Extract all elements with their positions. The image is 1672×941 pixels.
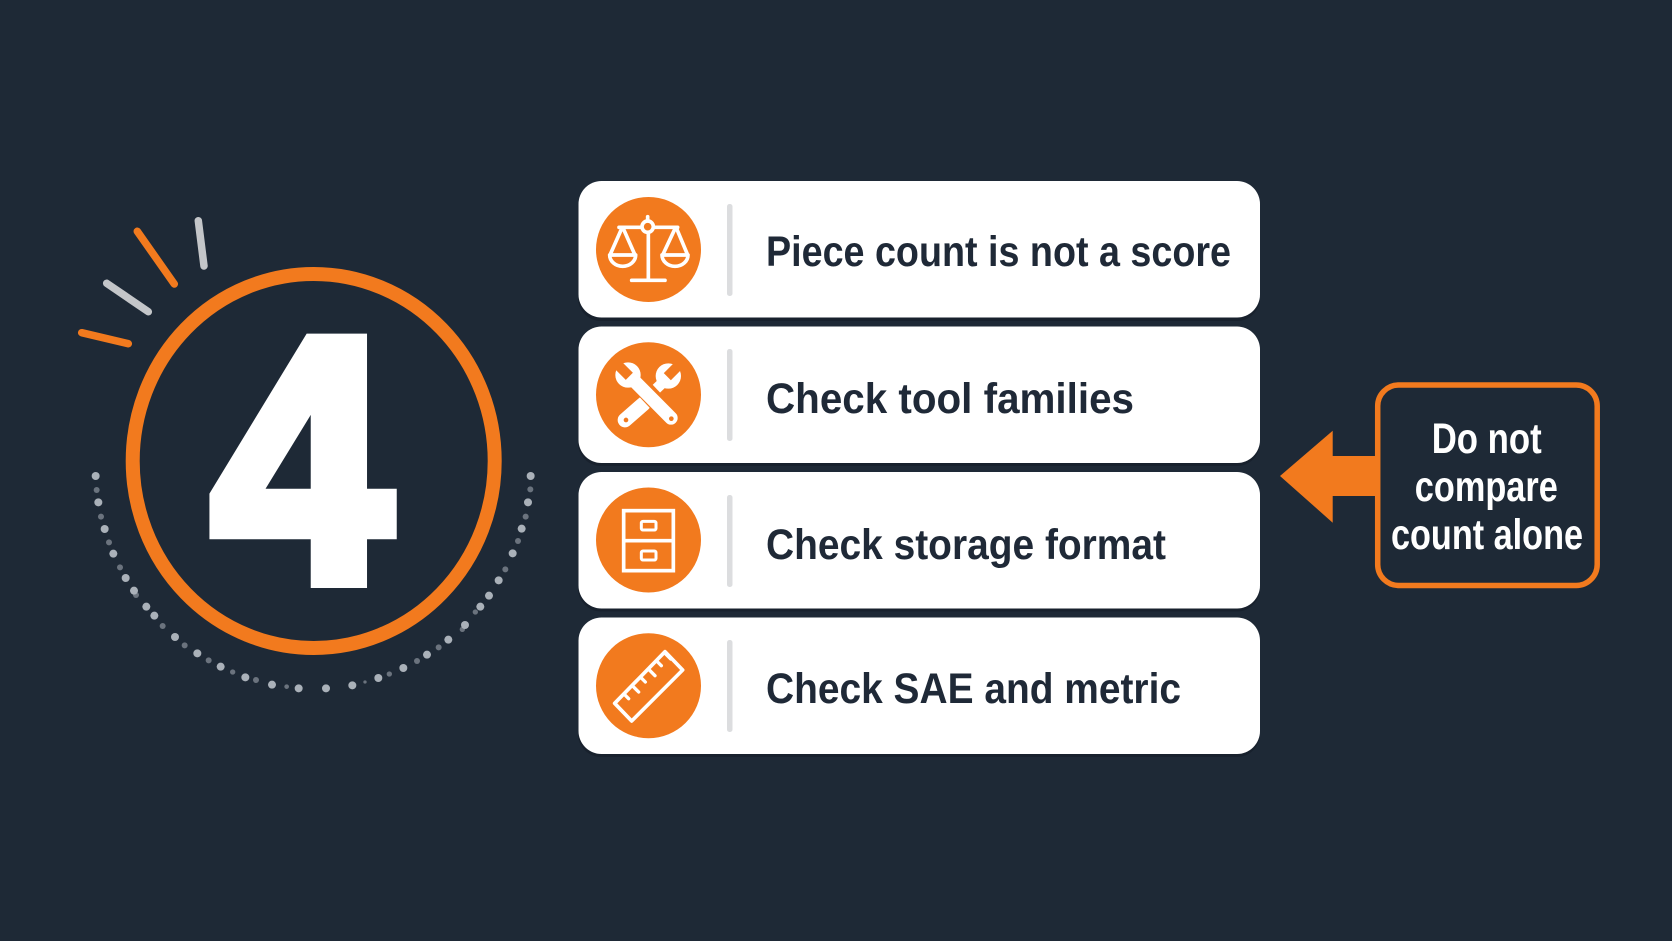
divider (727, 640, 732, 732)
callout: do not compare count alone: Do not (1432, 415, 1542, 463)
divider (727, 495, 732, 587)
dotted arc (92, 472, 535, 692)
panel: card 2 tool families (578, 326, 1260, 466)
icon: ruler (596, 633, 701, 738)
burst rays (82, 221, 204, 344)
panel: card 4 SAE and metric (578, 618, 1260, 757)
label: Check storage format (766, 521, 1166, 569)
panel: card 3 storage format (578, 472, 1260, 612)
divider (727, 204, 732, 296)
icon: balance scale (596, 197, 701, 302)
label: Check tool families (766, 375, 1134, 423)
icon: crossed tools (596, 342, 701, 447)
arrow: pointing to cards (1280, 431, 1376, 523)
orange ring (133, 274, 495, 648)
panel: card 1 piece count (578, 181, 1260, 321)
icon: file cabinet (596, 488, 701, 592)
callout: do not compare count alone: compare (1415, 463, 1558, 511)
label: Check SAE and metric (766, 665, 1181, 713)
callout: do not compare count alone (1378, 385, 1597, 586)
callout: do not compare count alone: count alone (1391, 511, 1583, 559)
number 4: 4 (212, 267, 394, 655)
label: Piece count is not a score (766, 228, 1231, 276)
panel: big number badge (82, 221, 535, 692)
divider (727, 349, 732, 441)
